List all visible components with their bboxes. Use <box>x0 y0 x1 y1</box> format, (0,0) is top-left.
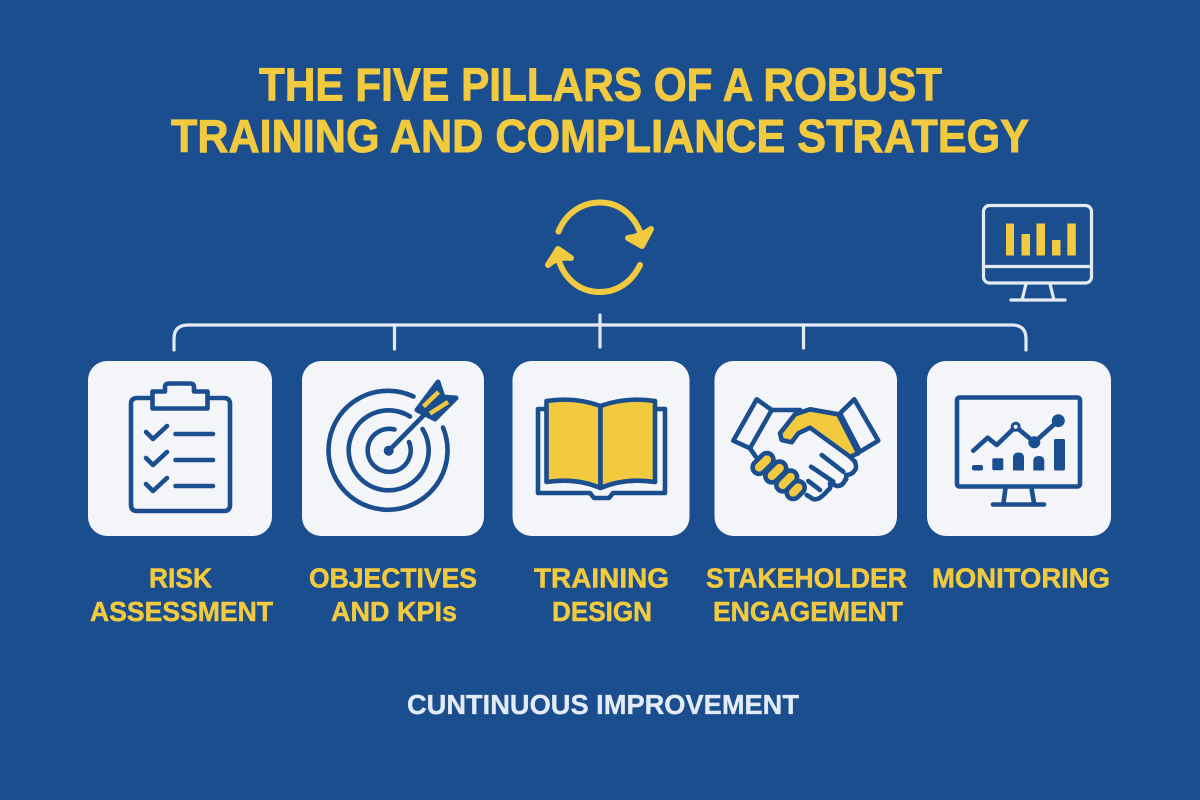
panel: training design card <box>512 361 690 536</box>
icon: analytics monitor <box>957 398 1080 504</box>
panel: monitoring card <box>927 361 1111 536</box>
label: objectives and KPIs: AND KPIs <box>331 596 457 627</box>
label: training design: DESIGN <box>552 596 652 627</box>
label: objectives and KPIs <box>309 562 477 627</box>
icon: open book <box>538 400 665 498</box>
label: training design <box>534 562 669 627</box>
label: risk assessment <box>90 562 273 627</box>
icon: dashboard monitor <box>984 206 1092 300</box>
connector bracket <box>174 315 1026 350</box>
icon: handshake <box>733 399 878 502</box>
label: training design: TRAINING <box>534 562 669 594</box>
icon: cycle arrows <box>548 202 651 292</box>
panel: objectives and KPIs card <box>302 361 484 536</box>
dashboard bars <box>1006 224 1076 256</box>
title: THE FIVE PILLARS OF A ROBUST <box>259 58 942 110</box>
label: stakeholder engagement <box>706 562 907 627</box>
label: stakeholder engagement: STAKEHOLDER <box>706 562 907 594</box>
hand fingers <box>750 450 807 502</box>
panel: stakeholder engagement card <box>714 361 897 536</box>
icon: clipboard checklist <box>131 384 230 511</box>
label: risk assessment: RISK <box>149 562 212 594</box>
chart bars <box>972 439 1065 470</box>
title: TRAINING AND COMPLIANCE STRATEGY <box>171 110 1029 162</box>
label: monitoring: MONITORING <box>932 562 1110 594</box>
label: risk assessment: ASSESSMENT <box>90 596 273 627</box>
label: objectives and KPIs: OBJECTIVES <box>309 562 477 594</box>
label: stakeholder engagement: ENGAGEMENT <box>713 596 903 627</box>
title <box>171 58 1029 162</box>
icon: target with arrow <box>329 382 456 510</box>
footer text: CUNTINUOUS IMPROVEMENT <box>407 689 799 720</box>
panel: risk assessment card <box>88 361 272 536</box>
